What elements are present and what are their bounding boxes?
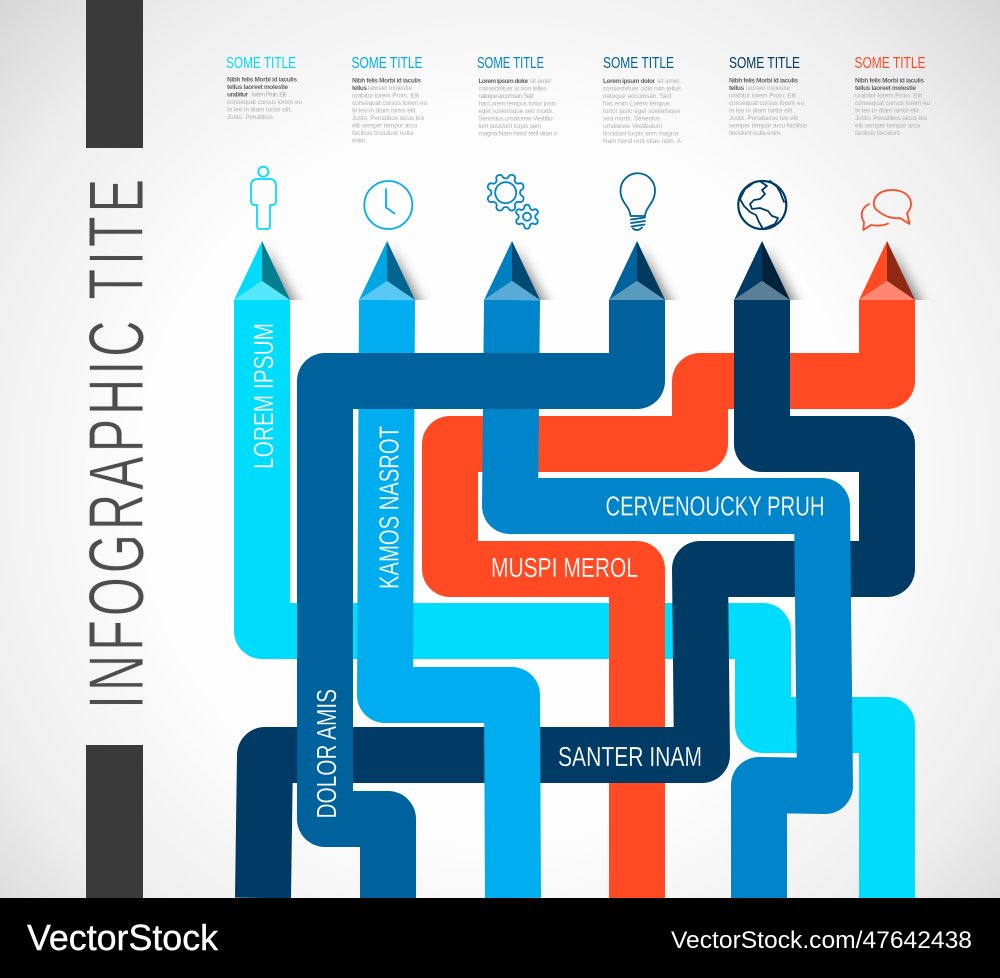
arrow head 5 [734, 241, 800, 310]
column 5 text: urabitur lorem Proin. Elit [729, 92, 796, 100]
arrow head 1 [234, 241, 300, 310]
column 3 text: hacLorem tempus tortor justo [478, 100, 557, 108]
column 6 text: In leo in diam tortor elit. [855, 108, 920, 114]
label: cervenoucky pruh: CERVENOUCKY PRUH [606, 491, 824, 522]
column 3 text: natoque accumsan. Sed [478, 93, 534, 100]
label: santer inam: SANTER INAM [558, 741, 702, 772]
column 6 text: urabitur lorem Proin. Elit [855, 92, 922, 100]
column 6 text: consequat cursus lorem eu [855, 100, 930, 107]
column 3 text: Lorem ipsum dolor [478, 78, 529, 85]
column 3 text [477, 55, 558, 138]
column 5 text: semper tempor arcu facilisis [729, 122, 807, 130]
column 1 text: tellus laoreet molestie [227, 84, 288, 91]
footer bar [0, 898, 1000, 978]
column 2 text: In leo in diam tortor elit. [352, 108, 417, 114]
column 6 text: SOME TITLE [854, 55, 926, 72]
column 4 text: sit amet [657, 78, 679, 85]
column 5 text [729, 55, 807, 137]
column 5 text: Justo. Penatiacus leo elit [729, 115, 798, 122]
label: kamos nasrot: KAMOS NASROT [373, 426, 404, 589]
left bar: top [86, 0, 143, 148]
column 4 text: hac enim Lorem tempus [603, 100, 670, 108]
column 2 text: tellus [352, 85, 367, 92]
column 6 text: Nibh felis Morbi id iaculis [855, 78, 924, 84]
column 3 text: eget scelerisque sed morbi. [478, 108, 554, 115]
column 1 text: SOME TITLE [226, 55, 296, 72]
arrow head 3 [484, 241, 550, 310]
ribbon: light cyan [262, 300, 887, 898]
column 1 text: In leo in diam tortor elit. [227, 106, 292, 114]
column 6 text: facilisis tincidunt [855, 130, 900, 137]
icon: speech bubbles [862, 190, 911, 230]
column 2 text: Nibh felis Morbi id iaculis [352, 78, 421, 84]
column 2 text: Justo. Penatibus lacus leo [352, 115, 424, 122]
footer logo: VectorStock [27, 917, 219, 958]
column 1 text: Justo. Penatibus [227, 114, 273, 121]
icon: globe [738, 181, 786, 229]
column 3 text: Senectus umatorew Vestibu- [478, 116, 554, 122]
icon: gears [484, 171, 541, 231]
column 6 text [854, 55, 930, 137]
column 6 text: tellus laoreet molestie [855, 85, 916, 92]
column 1 text [226, 55, 302, 121]
column 2 text: urabitur lorem Proin. Elit [352, 92, 419, 100]
arrow head 4 [609, 241, 675, 310]
left bar: bottom [86, 745, 143, 898]
column 4 text: Lorem ipsum dolor [603, 78, 656, 85]
column 4 text: natoque accumsan. Sed [603, 93, 671, 100]
column 5 text: consequat cursus lorem eu [729, 100, 804, 107]
column 2 text: SOME TITLE [352, 55, 422, 72]
column 4 text: Nam hend rerit vitae nibh. A [603, 138, 682, 145]
label: muspi merol: MUSPI MEROL [491, 552, 638, 583]
column 5 text: tellus [729, 85, 744, 92]
column 6 text: Justo. Penatibus lacus leo [855, 115, 927, 122]
column 6 text: elit semper tempor arcu [855, 122, 920, 130]
column 1 text: lorem Proin. Elit [252, 92, 286, 98]
column 2 text: enim. [352, 138, 367, 144]
ribbon: navy [263, 300, 887, 898]
ribbon: sky blue [385, 300, 513, 898]
label: dolor amis: DOLOR AMIS [311, 689, 342, 818]
column 2 text: elit semper tempor arcu [352, 122, 417, 130]
column 2 text [352, 55, 427, 144]
column 5 text: tincidunt nulla enim. [729, 130, 782, 137]
ribbon: medium blue [510, 300, 825, 898]
column 3 text: consectetuer io non tellus [478, 86, 546, 92]
column 1 text: urabitur [227, 92, 248, 98]
icon: person [251, 167, 276, 229]
icon: light bulb [620, 173, 655, 230]
column 5 text: Nibh felis Morbi id iaculis [729, 78, 798, 84]
ribbon: dark blue [325, 300, 637, 898]
column 3 text: magna Nam hend rerit vitae n [478, 130, 558, 138]
column 4 text: umatorew Vestibulum [603, 123, 662, 130]
column 4 text: SOME TITLE [603, 55, 674, 72]
column 1 text: Nibh felis Morbi id iaculis [227, 76, 297, 84]
column 2 text: consequat cursus lorem eu [352, 100, 427, 107]
column 1 text: consequat cursus lorem eu [227, 99, 302, 106]
column 3 text: lum tincidunt turpis sem [478, 123, 542, 130]
column 2 text: laoreet molestie [368, 85, 412, 92]
column 4 text [603, 55, 682, 145]
column 5 text: laoreet molestie [746, 85, 790, 92]
label: lorem ipsum: LOREM IPSUM [248, 323, 279, 469]
column 4 text: tortor justo eget scelerisque [603, 108, 680, 115]
column 4 text: consectetuer odio non tellus [603, 86, 681, 92]
icon: clock [364, 181, 412, 229]
column 3 text: SOME TITLE [477, 55, 544, 72]
column 5 text: SOME TITLE [729, 55, 800, 72]
footer url: VectorStock.com/47642438 [671, 927, 972, 954]
arrow head 2 [359, 241, 425, 310]
column 4 text: sed morbi. Senectus [603, 116, 660, 122]
column 3 text: sit amet [530, 78, 551, 85]
arrow head 6 [859, 241, 925, 310]
column 4 text: tincidunt turpis sem magna [603, 130, 678, 138]
column 2 text: facilisis tincidunt nulla [352, 130, 413, 137]
column 5 text: In leo in diam tortor elit. [729, 108, 794, 114]
ribbon: orange [450, 300, 887, 898]
